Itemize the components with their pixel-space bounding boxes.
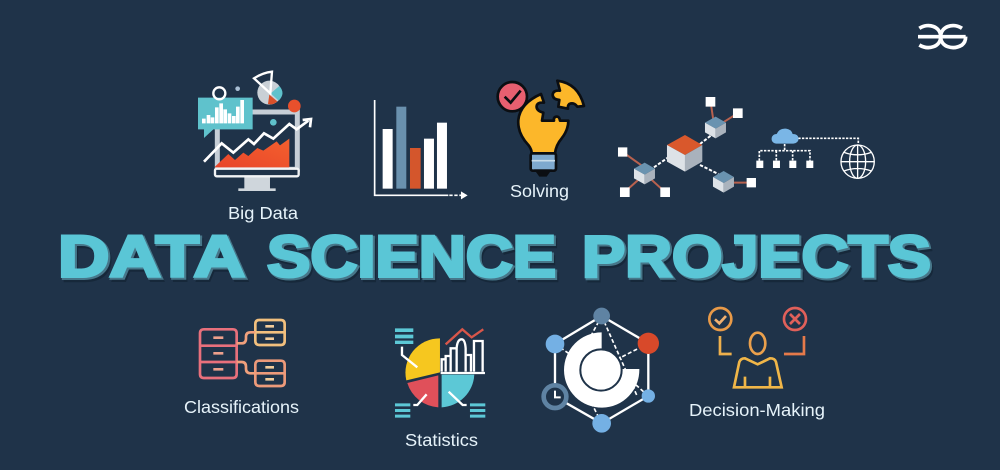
ring bbox=[213, 87, 225, 99]
title outline: SCIENCE bbox=[268, 226, 558, 291]
chat box bars bbox=[202, 100, 244, 123]
clock hands bbox=[555, 391, 561, 397]
axes bbox=[375, 100, 448, 195]
right bracket bbox=[784, 336, 804, 354]
white nodes bbox=[618, 97, 756, 197]
bar outlines bbox=[442, 339, 483, 372]
tree nodes bbox=[756, 161, 813, 168]
label: Statistics: Statistics bbox=[405, 430, 478, 450]
bulb body bbox=[518, 94, 568, 153]
icon: statistics pie chart bbox=[395, 328, 485, 418]
label: Decision-Making: Decision-Making bbox=[689, 400, 825, 420]
title shadow bbox=[61, 228, 934, 294]
icon: problem solving light bulb bbox=[498, 81, 584, 175]
title shadow: SCIENCE bbox=[270, 228, 559, 294]
chat box bbox=[198, 98, 253, 138]
pointer lines bbox=[402, 347, 467, 405]
white dashed connectors bbox=[654, 135, 718, 174]
red area chart bbox=[215, 139, 289, 167]
growth arrow bbox=[204, 121, 308, 162]
body bbox=[734, 358, 782, 387]
monitor stand bbox=[238, 177, 276, 191]
left bracket bbox=[720, 336, 732, 354]
title outline: PROJECTS bbox=[584, 226, 932, 291]
pie red bbox=[407, 375, 438, 407]
connectors bbox=[237, 332, 255, 373]
right top box bbox=[255, 320, 285, 345]
head bbox=[750, 333, 765, 354]
dashed links bbox=[555, 316, 648, 423]
inner disc bbox=[580, 349, 622, 391]
title outline: DATA bbox=[60, 226, 246, 291]
icon: bar chart bbox=[375, 100, 468, 199]
small cube top bbox=[705, 117, 726, 138]
central cube bbox=[667, 135, 702, 172]
teal dot bbox=[270, 119, 277, 126]
check badge bbox=[498, 82, 527, 111]
fan outline bbox=[254, 72, 272, 93]
cross circle bbox=[784, 308, 806, 330]
title fill bbox=[58, 224, 931, 290]
hexagon outline bbox=[555, 316, 648, 423]
axis arrow bbox=[461, 191, 468, 199]
right dashes bbox=[265, 326, 274, 379]
clock node bbox=[544, 385, 566, 408]
title shadow: PROJECTS bbox=[585, 228, 934, 294]
icon: cloud hierarchy and globe bbox=[756, 129, 874, 178]
nodes bbox=[546, 308, 659, 433]
icon: hexagon network bbox=[544, 308, 659, 433]
dashed tree lines bbox=[759, 138, 858, 161]
label: Big Data: Big Data bbox=[228, 203, 298, 223]
baseline bbox=[441, 369, 485, 376]
title fill: DATA bbox=[58, 224, 245, 290]
small cube left bbox=[634, 163, 655, 184]
red dot bbox=[288, 100, 301, 112]
puzzle piece bbox=[553, 81, 584, 109]
donut bbox=[564, 332, 639, 408]
monitor bezel bbox=[215, 169, 299, 176]
icon: connected cubes network bbox=[618, 97, 756, 197]
title: DATA SCIENCE PROJECTS bbox=[58, 224, 934, 294]
title shadow: DATA bbox=[61, 228, 248, 294]
trend line bbox=[446, 329, 483, 344]
logo: GeeksforGeeks bbox=[918, 26, 966, 48]
icon: decision making person bbox=[709, 308, 806, 387]
bars bbox=[383, 107, 447, 189]
monitor frame bbox=[217, 112, 297, 169]
red connectors bbox=[623, 102, 751, 192]
box dashes bbox=[213, 338, 223, 369]
title fill: SCIENCE bbox=[267, 224, 556, 290]
right bottom box bbox=[255, 361, 285, 386]
icon: big data monitor bbox=[198, 72, 311, 191]
cross mark bbox=[790, 314, 800, 324]
globe bbox=[841, 145, 874, 178]
base stripe bbox=[532, 158, 555, 163]
pie yellow bbox=[405, 338, 440, 380]
cloud bbox=[772, 129, 799, 144]
pie bbox=[257, 81, 282, 105]
label: Solving: Solving bbox=[510, 181, 569, 201]
pie teal bbox=[442, 375, 474, 407]
check mark bbox=[505, 91, 521, 103]
dashed axis extension bbox=[449, 193, 462, 198]
label: Classifications: Classifications bbox=[184, 397, 299, 417]
list markers bbox=[395, 328, 485, 418]
arrow head bbox=[303, 119, 311, 127]
bulb base bbox=[531, 153, 556, 175]
icon: classifications tree bbox=[200, 320, 285, 386]
title outline bbox=[60, 226, 932, 291]
check mark bbox=[715, 316, 726, 323]
dot bbox=[235, 86, 240, 91]
left stack bbox=[200, 329, 237, 378]
title fill: PROJECTS bbox=[582, 224, 931, 290]
check circle bbox=[709, 308, 731, 330]
small cube right bbox=[713, 171, 734, 193]
